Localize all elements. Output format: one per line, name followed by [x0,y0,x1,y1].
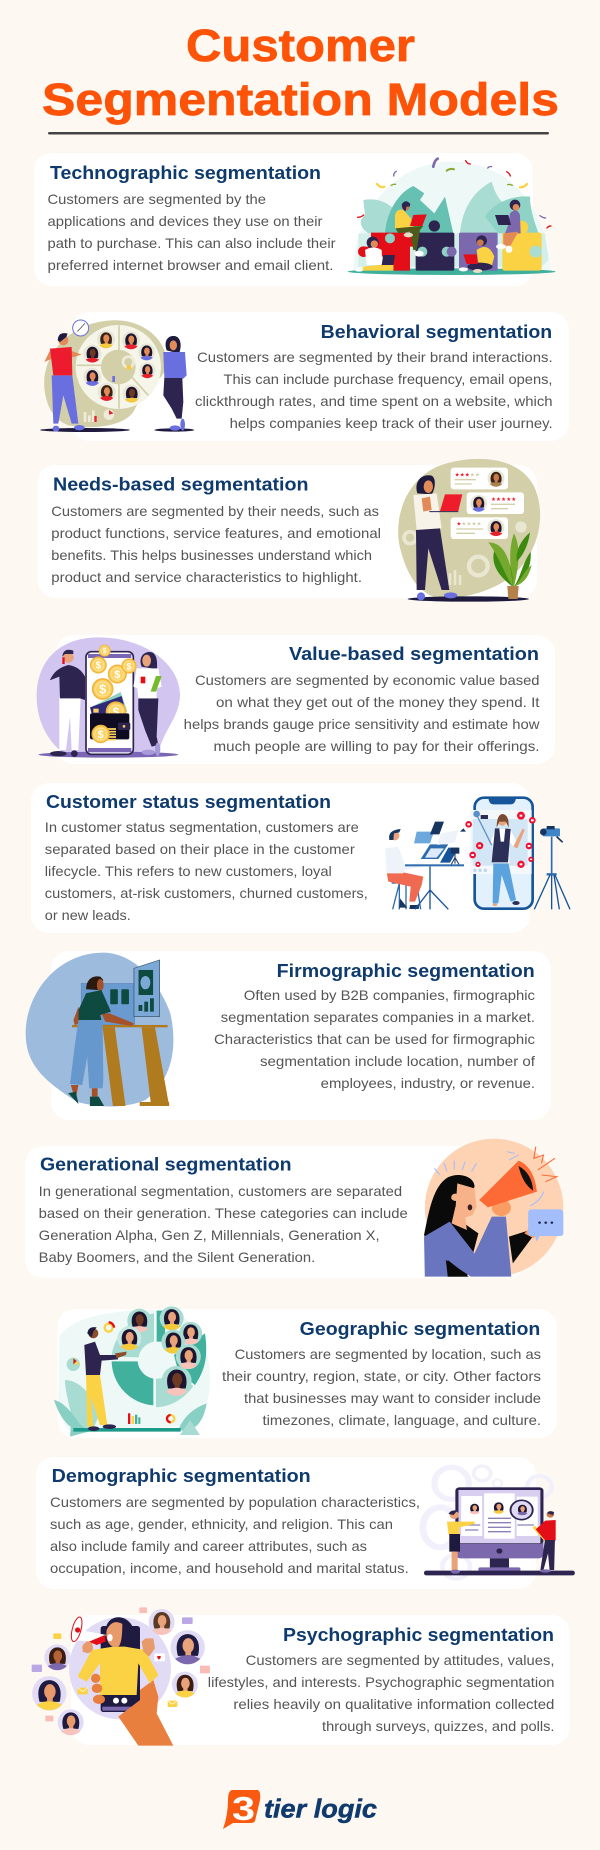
woman in blue shirt [154,336,194,432]
body text [45,819,368,923]
confetti [358,159,551,228]
body text: helps brands gauge price sensitivity and estimate how [184,716,540,732]
illustration: profiles on monitor [423,1466,575,1579]
man with magnifier [536,1511,556,1573]
illustration: woman with megaphone [424,1139,563,1277]
body text: Customers are segmented by economic value based [195,672,540,688]
body text: In customer status segmentation, customers are [45,819,359,835]
follower faces [32,1609,205,1735]
body text [48,191,336,273]
mini charts [67,1322,174,1424]
speech bubble [528,1209,563,1242]
woman sitting left [355,237,395,272]
panel: Value-based segmentation [37,635,555,764]
fingers [91,1674,105,1704]
body text: that businesses may want to consider include [244,1390,541,1406]
body text: Customers are segmented by their needs, such as [51,503,379,519]
body text: Customers are segmented by their brand interactions. [197,349,553,365]
body text: Customers are segmented by population characteristics, [50,1494,420,1510]
panel: Technographic segmentation [34,153,556,286]
panel: Needs-based segmentation [38,459,540,602]
phone [101,1626,140,1712]
logo wordmark: tier logic [264,1794,378,1824]
logo badge [223,1790,260,1829]
heading: Generational segmentation [40,1155,292,1175]
panel: Geographic segmentation [54,1306,557,1438]
potted plant [488,532,532,599]
heading: Value-based segmentation [289,644,539,664]
review cards: ★★★★★ [491,496,516,503]
man at desk [385,822,466,909]
ring chart [112,1311,206,1407]
body text: Baby Boomers, and the Silent Generation. [39,1249,315,1265]
body text: such as age, gender, ethnicity, and religion. This can [50,1516,393,1532]
body text [51,503,381,585]
body text: separated based on their place in the customer [45,841,355,857]
body text: applications and devices they use on their [48,213,323,229]
body text: product functions, service features, and emotional [51,525,381,541]
body text: occupation, income, and household and marital status. [50,1560,409,1576]
phone with streamer [470,798,533,909]
body text: their country, region, state, or city. Other factors [222,1368,541,1384]
woman [424,1175,540,1277]
notification badges [465,812,536,868]
camera on tripod [534,826,570,909]
body text: This can include purchase frequency, email opens, [224,371,552,387]
body text [39,1183,408,1265]
woman with megaphone [78,1617,158,1695]
body text: through surveys, quizzes, and polls. [322,1718,554,1734]
gears [423,1466,552,1579]
woman on yellow piece [495,200,521,253]
woman pointing [447,1510,475,1574]
heading: Technographic segmentation [50,163,321,183]
reaction bubbles [32,1607,210,1721]
body text: preferred internet browser and email client. [48,257,334,273]
hand [118,1680,173,1746]
illustration: audience pie chart [54,1306,210,1437]
desk [72,1025,169,1106]
body text: customers, at-risk customers, churned customers, [45,885,368,901]
illustration: influencer livestream [385,798,570,909]
faces [117,1306,202,1396]
body text: path to purchase. This can also include their [48,235,336,251]
phone [86,652,133,754]
woman sitting center [459,235,494,273]
heading: Firmographic segmentation [277,961,535,981]
monitors [81,960,160,1025]
body text: employees, industry, or revenue. [321,1075,535,1091]
panel: Generational segmentation [25,1139,563,1278]
leaves and ground [54,1380,207,1437]
body text: Generation Alpha, Gen Z, Millennials, Generation X, [39,1227,380,1243]
heading: Psychographic segmentation [283,1625,554,1645]
magnifier [511,1500,553,1548]
woman with cup and book [133,652,162,756]
body text: In generational segmentation, customers are separated [39,1183,402,1199]
body text: also include family and career attributes, such as [50,1538,367,1554]
title: Segmentation Models [42,74,559,125]
megaphone [69,1616,107,1645]
panel: Demographic segmentation [36,1457,575,1589]
body text: or new leads. [45,907,131,923]
shout marks [434,1147,557,1206]
body text [195,349,553,431]
heading: Geographic segmentation [300,1319,540,1339]
man on phone [50,650,85,757]
body text: much people are willing to pay for their offerings. [214,738,540,754]
body text: lifestyles, and interests. Psychographic segmentation [208,1674,555,1690]
shadow [408,596,529,602]
woman with laptop [413,475,462,600]
man [84,1327,127,1431]
body text: lifecycle. This refers to new customers, loyal [45,863,332,879]
body text [50,1494,420,1576]
illustration: phone with coins and wallet [37,637,180,758]
body text: clickthrough rates, and time spent on a website, which [195,393,553,409]
logo: 3 tier logic: 3 [232,1790,255,1827]
body text: Often used by B2B companies, firmographic [244,987,535,1003]
body text [208,1652,555,1734]
body text: relies heavily on qualitative information collected [233,1696,554,1712]
body text: Characteristics that can be used for firmographic [214,1031,535,1047]
body text: Customers are segmented by the [48,191,266,207]
illustration: influencer on phone [32,1607,210,1746]
logo: 3 tier logic [223,1790,378,1829]
review cards: ★★★★★ [456,521,482,528]
panel: Customer status segmentation [31,783,570,933]
heading: Needs-based segmentation [53,475,308,495]
megaphone [479,1161,537,1207]
monitor [455,1487,543,1571]
heading: Behavioral segmentation [321,322,552,342]
illustration: team on puzzle pieces [348,159,556,275]
body text [214,987,535,1091]
illustration: woman at standing desk [26,953,173,1106]
body text: based on their generation. These categories can include [39,1205,408,1221]
panel: Firmographic segmentation [26,951,551,1120]
review cards: ★★★★★ [455,472,480,479]
body text: on what they get out of the money they spend. It [216,694,540,710]
illustration: woman reading reviews [398,459,540,602]
illustration: customer wheel [40,320,194,432]
man in red shirt [40,333,130,432]
title [42,20,559,125]
body text [222,1346,541,1428]
body text [184,672,540,754]
body text: Customers are segmented by attitudes, values, [246,1652,554,1668]
body text: benefits. This helps businesses understand which [51,547,372,563]
man with red laptop [395,201,427,257]
heading: Customer status segmentation [46,792,331,812]
body text: segmentation separates companies in a market. [221,1009,535,1025]
panel: Behavioral segmentation [40,312,569,441]
panel: Psychographic segmentation [32,1607,570,1746]
body text: helps companies keep track of their user journey. [230,415,553,431]
title: Customer [186,20,415,71]
body text: segmentation include location, number of [260,1053,535,1069]
body text: product and service characteristics to highlight. [51,569,362,585]
body text: Customers are segmented by location, such as [235,1346,541,1362]
clock [73,320,89,336]
heading: Demographic segmentation [52,1466,311,1486]
coins, cards, wallet [90,645,136,742]
woman [68,976,134,1106]
body text: timezones, climate, language, and culture. [262,1412,541,1428]
base [424,1571,575,1575]
review cards [451,468,524,539]
